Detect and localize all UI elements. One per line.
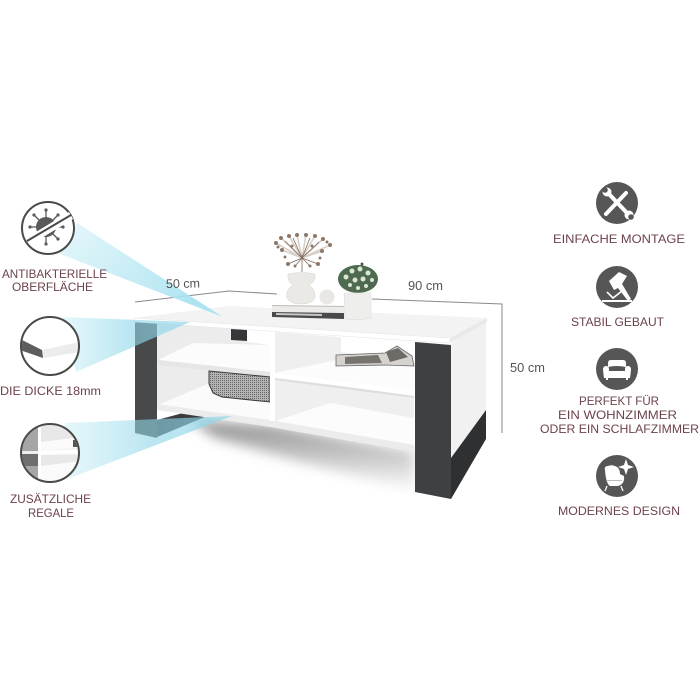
label: sturdy: STABIL GEBAUT [571,315,665,329]
icon: tools [596,182,638,224]
label: modern design: MODERNES DESIGN [558,504,680,518]
label: antibacterial [2,267,107,294]
left leg [135,320,157,438]
label: living room or bedroom: PERFEKT FÜR [579,394,659,408]
icon: modern design [596,455,638,497]
label: antibacterial: ANTIBAKTERIELLE [2,267,107,281]
magazine [336,346,414,366]
decor: potted plant [338,262,378,320]
upper shelf right [275,360,414,390]
label: living room or bedroom: ODER EIN SCHLAFZIMMER [540,422,699,436]
label: extra shelves: ZUSÄTZLICHE [10,492,91,506]
floor shadow [190,420,414,490]
label: living room or bedroom: EIN WOHNZIMMER [558,408,677,422]
icon: extra shelves [21,424,81,482]
label: antibacterial: OBERFLÄCHE [12,280,93,294]
lower board front [157,404,414,452]
label: extra shelves [10,492,91,520]
wire basket [209,371,270,402]
label: 50 cm height: 50 cm [510,361,545,375]
lower shelf top [158,383,270,420]
label: living room or bedroom [540,394,699,436]
back of left leg base [157,413,205,437]
decor: flower in vase [274,233,332,304]
upper shelf left [158,343,270,372]
right side panel [451,320,486,458]
icon: hammer [596,266,638,308]
label: 90 cm width: 90 cm [408,279,443,293]
right leg [415,342,451,499]
centre divider [270,330,275,421]
table top [134,306,487,338]
callout beam: thickness [62,317,190,372]
icon: antibacterial [22,202,74,254]
callout beam: antibacterial [60,223,223,317]
label: 50 cm depth: 50 cm [166,276,200,291]
label: thickness: DIE DICKE 18mm [0,384,101,398]
decor: books and ball [272,290,344,319]
interior back panels [157,323,270,420]
right leg base [451,410,486,499]
callout beam: shelves [65,416,232,478]
icon: board thickness [20,317,80,375]
dimension lines [135,291,502,433]
table [134,306,487,499]
label: easy assembly: EINFACHE MONTAGE [553,232,685,246]
icon: sofa [596,348,638,390]
label: extra shelves: REGALE [28,506,74,520]
